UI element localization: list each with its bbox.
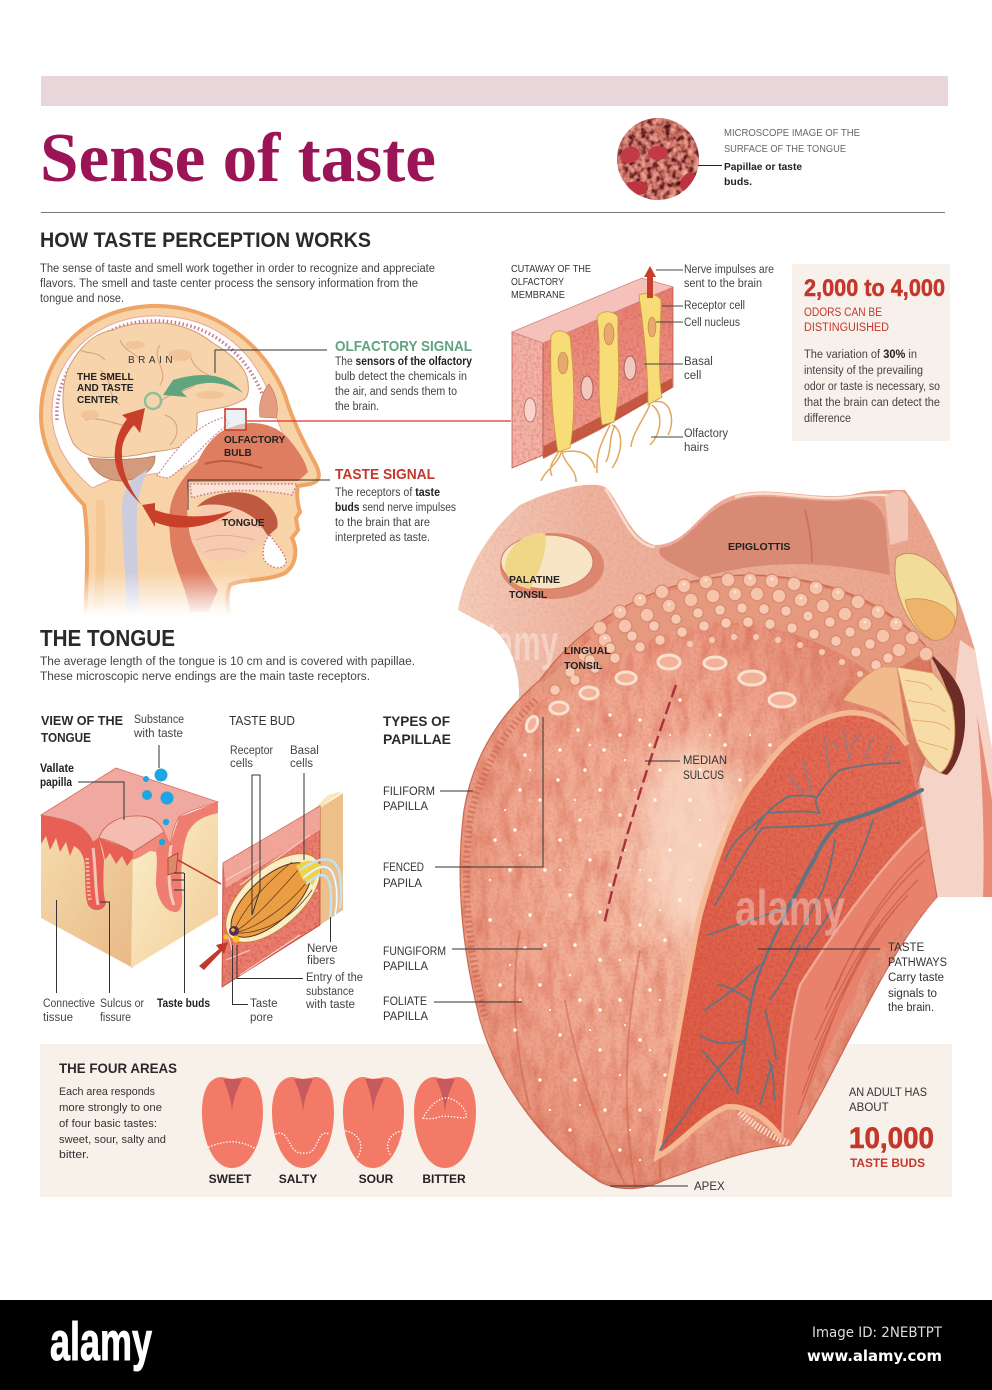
fade at neck [70, 572, 250, 624]
olfactory signal text: OLFACTORY SIGNAL [335, 338, 472, 355]
median sulcus label [645, 755, 727, 782]
taste pathways label: TASTE [888, 942, 925, 954]
taste pore [223, 926, 240, 943]
cube labels: Substance [134, 714, 184, 726]
taste pathways label: PATHWAYS [888, 957, 947, 969]
watermarks: alamy [470, 615, 558, 671]
nerve fibers [300, 859, 341, 918]
tongue side ridge [467, 700, 536, 1020]
tongue map: bitter: BITTER [422, 1172, 466, 1186]
types of papillae: FENCED [383, 862, 424, 874]
taste pathways label: Carry taste [888, 972, 944, 984]
large tongue illustration [455, 485, 992, 1195]
tongue anatomy labels: TONSIL [509, 589, 548, 601]
tongue intro paragraph: The average length of the tongue is 10 cm and is covered with papillae. [40, 656, 415, 668]
palatine tonsil [500, 533, 604, 599]
head skin [41, 306, 319, 620]
stat box: odors: ODORS CAN BE [804, 307, 882, 319]
types of papillae: FUNGIFORM [383, 946, 446, 958]
cube labels: papilla [40, 777, 73, 789]
membrane labels: cell [684, 370, 701, 382]
taste buds stat [849, 1087, 934, 1170]
intro paragraph: flavors. The smell and taste center process the sensory information from the [40, 278, 418, 290]
types of papillae [383, 713, 543, 1023]
membrane labels: hairs [684, 442, 709, 454]
cube leader lines [56, 782, 184, 993]
taste signal text: interpreted as taste. [335, 532, 430, 544]
brain labels: TONGUE [222, 518, 265, 529]
olfactory bulb marker [225, 409, 511, 430]
jaw [263, 535, 286, 568]
taste buds stat: AN ADULT HAS [849, 1087, 927, 1099]
bud leader lines [232, 773, 330, 1004]
membrane caption: MEMBRANE [511, 290, 565, 301]
right pharynx wall [917, 640, 992, 897]
stat box: odors: that the brain can detect the [804, 397, 940, 409]
right tonsil section [843, 667, 955, 773]
four areas text: more strongly to one [59, 1102, 162, 1114]
apex label: APEX [694, 1181, 725, 1193]
membrane caption: OLFACTORY [511, 277, 564, 288]
taste pathways label: signals to [888, 988, 937, 1000]
tongue map: sour: SOUR [359, 1172, 394, 1186]
four areas text: of four basic tastes: [59, 1118, 157, 1130]
stat box: odors [792, 264, 950, 441]
membrane top face [512, 278, 673, 343]
membrane labels: Receptor cell [684, 300, 745, 312]
pit walls [41, 802, 218, 912]
palate bone [190, 484, 297, 498]
taste signal text: The receptors of taste [335, 487, 440, 499]
tongue map: salty: SALTY [279, 1172, 317, 1186]
olfactory signal text [335, 338, 473, 413]
dark crescent [927, 650, 965, 775]
olfactory signal text: bulb detect the chemicals in [335, 371, 467, 383]
brain labels [77, 355, 285, 529]
membrane caption: CUTAWAY OF THE [511, 264, 591, 275]
cube labels: tissue [43, 1012, 73, 1024]
taste bud labels: Entry of the [306, 972, 363, 984]
olfactory membrane cutaway [510, 264, 774, 482]
right tonsil [895, 553, 957, 640]
tongue section in head [190, 501, 274, 561]
watermarks [470, 615, 845, 936]
taste signal text: to the brain that are [335, 517, 430, 529]
taste bud labels: Nerve [307, 943, 338, 955]
tongue map: sweet [202, 1077, 263, 1186]
cube right face [131, 802, 218, 968]
taste bud capsule [210, 838, 336, 958]
four areas text: sweet, sour, salty and [59, 1134, 166, 1146]
taste bud labels: substance [306, 986, 354, 998]
brain labels: BRAIN [128, 355, 176, 366]
taste buds stat: ABOUT [849, 1102, 889, 1114]
types of papillae: PAPILA [383, 878, 422, 890]
types of papillae: FILIFORM [383, 786, 435, 798]
intro paragraph [40, 263, 435, 305]
footer bar: alamy [50, 1312, 152, 1372]
vallate rings [524, 655, 795, 733]
tongue anatomy labels: TONSIL [564, 660, 603, 672]
cube heading [41, 713, 123, 745]
brain labels: CENTER [77, 395, 119, 406]
nerve impulse arrow [644, 266, 656, 298]
membrane labels: Basal [684, 356, 713, 368]
tongue map: salty [272, 1077, 334, 1186]
sinus bone [157, 417, 229, 478]
membrane left face [512, 332, 543, 468]
taste bud labels [230, 745, 363, 1024]
taste bud diagram [199, 714, 363, 1024]
taste bud labels: fibers [307, 955, 335, 967]
footer bar: www.alamy.com [807, 1347, 942, 1365]
membrane labels: sent to the brain [684, 278, 762, 290]
membrane caption [511, 264, 591, 301]
taste buds stat: TASTE BUDS [850, 1156, 925, 1170]
footer bar [0, 1300, 992, 1390]
muscle fringe [740, 745, 937, 1150]
tongue anatomy labels: PALATINE [509, 574, 560, 586]
cube labels: with taste [133, 728, 183, 740]
taste signal text: TASTE SIGNAL [335, 466, 435, 483]
olfactory hairs [541, 402, 672, 482]
taste signal text [335, 466, 456, 544]
taste bud labels: Taste [250, 998, 278, 1010]
types of papillae: FOLIATE [383, 996, 427, 1008]
throat and nasal cavity [169, 423, 308, 612]
tongue map: sour [343, 1077, 404, 1186]
section heading: how taste perception works: HOW TASTE PERCEPTION WORKS [40, 229, 371, 252]
membrane labels [684, 264, 774, 454]
green olfactory arrow [145, 375, 243, 409]
cube heading: VIEW OF THE [41, 713, 123, 728]
types of papillae: PAPILLAE [383, 731, 451, 747]
section heading: the tongue: THE TONGUE [40, 625, 175, 651]
taste substance drops [142, 768, 174, 845]
taste bud labels: cells [230, 758, 253, 770]
taste bud heading: TASTE BUD [229, 714, 295, 728]
cube labels: Vallate [40, 763, 74, 775]
stat box: odors: odor or taste is necessary, so [804, 381, 940, 393]
pharynx and back tissue [458, 485, 992, 897]
cube labels: Taste buds [157, 998, 210, 1010]
membrane labels: Cell nucleus [684, 317, 740, 329]
taste pathways label: the brain. [888, 1002, 934, 1014]
median sulcus label: SULCUS [683, 770, 724, 782]
red taste arrows [115, 408, 233, 528]
cut section [657, 713, 923, 1157]
receptor cells [551, 294, 662, 452]
brain [63, 323, 248, 458]
tongue body [460, 575, 937, 1189]
taste pathway nerves [660, 730, 922, 1150]
entry arrow [199, 942, 228, 970]
fungiform papillae dots [490, 700, 790, 1150]
stat box: odors: intensity of the prevailing [804, 365, 923, 377]
four areas text: bitter. [59, 1149, 89, 1161]
microscope caption [698, 127, 860, 188]
basal cells [296, 861, 322, 885]
cerebellum [88, 456, 155, 481]
lingual tonsil bumps [540, 576, 928, 695]
median sulcus label: MEDIAN [683, 755, 727, 767]
types of papillae: PAPILLA [383, 801, 428, 813]
tongue map: bitter [414, 1077, 476, 1186]
tongue anatomy labels [509, 541, 790, 672]
microscope caption: MICROSCOPE IMAGE OF THE [724, 127, 860, 139]
microscope caption: buds. [724, 176, 752, 188]
brain labels: OLFACTORY [224, 435, 285, 446]
microscope caption: Papillae or taste [724, 161, 802, 173]
taste bud labels: cells [290, 758, 313, 770]
slab back side [320, 793, 343, 925]
membrane labels: Nerve impulses are [684, 264, 774, 276]
olfactory signal text: The sensors of the olfactory [335, 356, 473, 368]
stat box: odors: 2,000 to 4,000 [804, 275, 945, 302]
tongue intro paragraph: These microscopic nerve endings are the main taste receptors. [40, 671, 370, 683]
view of the tongue cube [40, 713, 221, 1024]
types of papillae: PAPILLA [383, 1011, 428, 1023]
membrane labels: Olfactory [684, 428, 728, 440]
skull bone [52, 316, 296, 488]
tongue intro paragraph [40, 656, 415, 683]
tongue texture [455, 570, 945, 1195]
frontal sinus [259, 384, 277, 418]
taste signal text: buds send nerve impulses [335, 502, 456, 514]
intro paragraph: tongue and nose. [40, 293, 124, 305]
cube labels: fissure [100, 1012, 131, 1024]
taste bud labels: with taste [305, 999, 355, 1011]
four areas panel [40, 1044, 952, 1197]
brain labels: THE SMELL [77, 372, 134, 383]
four areas heading: THE FOUR AREAS [59, 1060, 177, 1076]
stat box: odors: difference [804, 413, 851, 425]
stat box: odors: The variation of 30% in [804, 349, 917, 361]
stat box: odors: DISTINGUISHED [804, 322, 889, 334]
slab front [222, 806, 320, 987]
taste bud labels: Receptor [230, 745, 273, 757]
head cross-section illustration [41, 306, 511, 624]
microscope image callout [616, 117, 860, 201]
taste bud labels: Basal [290, 745, 319, 757]
four areas text [59, 1086, 166, 1161]
cube labels: Sulcus or [100, 998, 144, 1010]
cube left face [41, 815, 133, 968]
title: Sense of taste [40, 120, 436, 197]
brain labels: BULB [224, 448, 252, 459]
cube top surface [41, 768, 218, 845]
cube labels [40, 714, 210, 1024]
tongue anatomy labels: EPIGLOTTIS [728, 541, 790, 553]
header band [41, 76, 948, 106]
median sulcus [604, 685, 676, 925]
olfactory signal text: the brain. [335, 401, 379, 413]
types of papillae: TYPES OF [383, 713, 450, 729]
apex label [610, 1181, 725, 1193]
taste pathways label [758, 942, 947, 1014]
taste buds stat: 10,000 [849, 1122, 934, 1155]
intro paragraph: The sense of taste and smell work together in order to recognize and appreciate [40, 263, 435, 275]
olfactory signal text: the air, and sends them to [335, 386, 457, 398]
microscope caption: SURFACE OF THE TONGUE [724, 143, 846, 155]
cube labels: Connective [43, 998, 95, 1010]
brain labels: AND TASTE [77, 383, 134, 394]
vallate papilla mound [99, 816, 164, 852]
four areas text: Each area responds [59, 1086, 155, 1098]
footer bar: Image ID: 2NEBTPT [812, 1325, 942, 1341]
spinal cord [122, 470, 147, 612]
tongue anatomy labels: LINGUAL [564, 645, 611, 657]
taste bud labels: pore [250, 1012, 273, 1024]
types of papillae: PAPILLA [383, 961, 428, 973]
cube heading: TONGUE [41, 730, 91, 745]
microscope image of papillae [616, 117, 700, 201]
membrane right face [543, 287, 673, 457]
watermarks: alamy [735, 880, 845, 936]
tongue map: sweet: SWEET [209, 1172, 252, 1186]
